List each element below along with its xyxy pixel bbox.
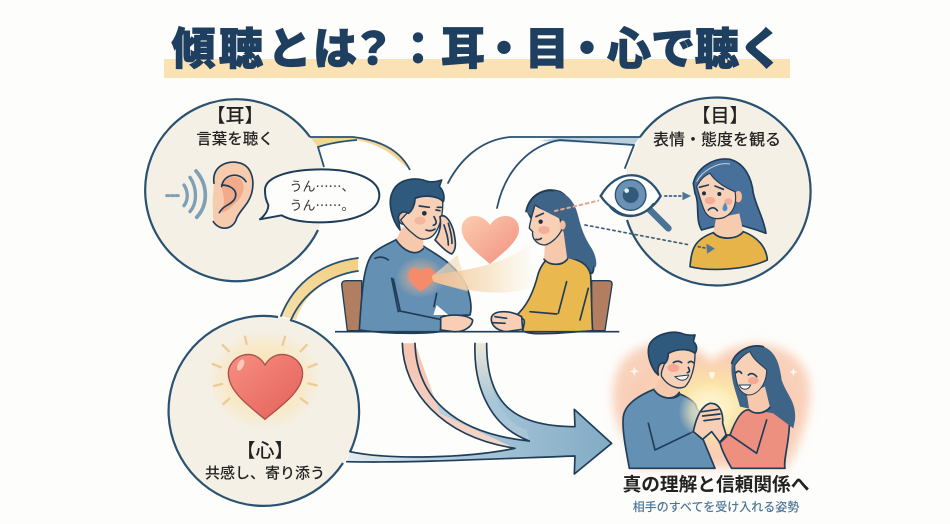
chairs <box>342 281 612 331</box>
speech bubble: うん……、 <box>289 176 355 195</box>
icon: ear <box>213 162 253 228</box>
result heading: 真の理解と信頼関係へ <box>623 474 810 495</box>
connector: ear to listener <box>310 137 410 170</box>
panel: heart <box>168 258 359 506</box>
heart caption: 共感し、寄り添う <box>205 464 325 482</box>
arrows converging to result <box>347 343 612 474</box>
panel: ear <box>145 99 410 281</box>
man's head <box>390 179 455 254</box>
man's body <box>359 239 473 333</box>
connector: heart to listener <box>281 258 358 320</box>
result illustration <box>613 332 810 514</box>
icon: sound waves <box>167 171 205 217</box>
ear heading: 【耳】 <box>206 105 264 127</box>
result man's head <box>648 332 697 398</box>
sparkles <box>630 367 797 379</box>
speech bubble: うん……。 <box>289 195 355 214</box>
eye heading: 【目】 <box>691 105 749 127</box>
central scene <box>335 179 619 334</box>
icon: glowing heart <box>208 330 322 430</box>
man's body <box>623 389 715 468</box>
result woman's head <box>731 346 795 428</box>
hand glow <box>678 383 738 440</box>
icon: magnifier eye <box>601 175 668 228</box>
clasped hands <box>693 403 727 443</box>
woman's head <box>526 191 596 267</box>
heart background <box>613 343 810 468</box>
dotted sight lines <box>555 192 715 253</box>
speech bubble <box>260 169 379 222</box>
table <box>335 329 619 334</box>
observed woman <box>690 159 767 269</box>
title: 傾聴とは？：耳・目・心で聴く <box>172 25 783 74</box>
connector: eye to listener <box>448 137 640 208</box>
heart heading: 【心】 <box>236 440 294 462</box>
result subheading: 相手のすべてを受け入れる姿勢 <box>633 499 799 514</box>
woman's body <box>720 407 789 468</box>
panel: eye <box>448 98 811 286</box>
eye caption: 表情・態度を観る <box>653 130 781 149</box>
woman's body <box>491 190 594 334</box>
empathy beam <box>432 243 534 293</box>
ear caption: 言葉を聴く <box>196 130 274 148</box>
icon: floating heart <box>462 216 519 264</box>
